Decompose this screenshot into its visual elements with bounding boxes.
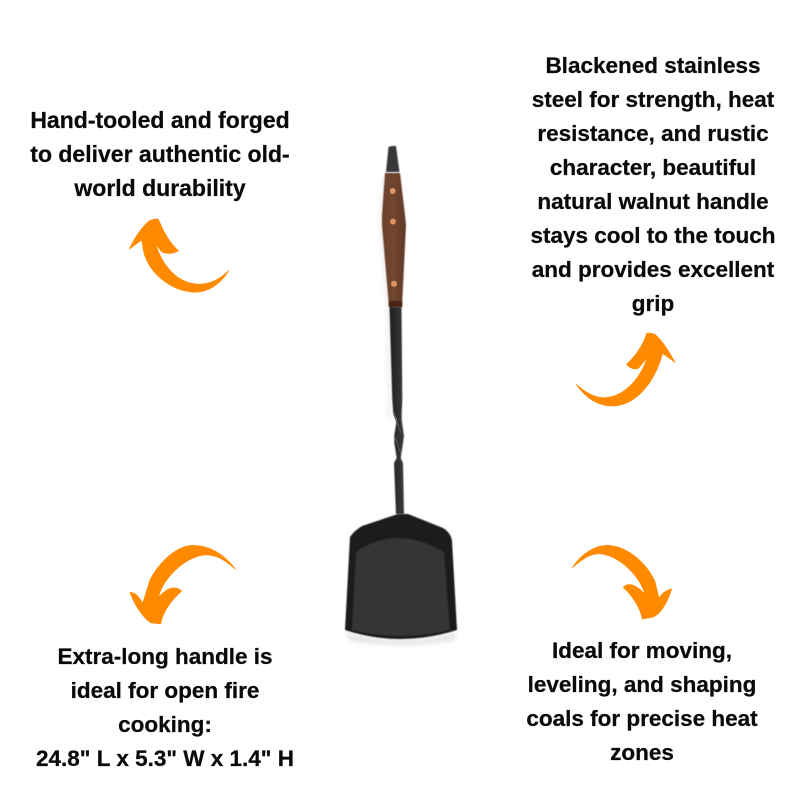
text: hand-tooled: world durability (74, 175, 246, 201)
steel shaft with twist (390, 307, 404, 514)
text: blackened stainless steel (530, 53, 776, 316)
text: ideal for moving: zones (610, 740, 674, 765)
walnut handle (382, 173, 406, 307)
text: blackened stainless steel: and provides excellent (532, 257, 774, 282)
text: extra-long handle: ideal for open fire (71, 678, 259, 703)
text: extra-long handle: 24.8" L x 5.3" W x 1.4" H (36, 746, 294, 771)
text: hand-tooled: to deliver authentic old- (30, 141, 290, 167)
text: ideal for moving: coals for precise heat (526, 706, 758, 731)
text: extra-long handle (36, 644, 294, 771)
shovel shadow (346, 632, 456, 645)
text: ideal for moving: leveling, and shaping (528, 672, 756, 697)
text: blackened stainless steel: steel for strength, heat (532, 87, 774, 112)
handle tang tip (386, 146, 400, 172)
arrow: bottom right (572, 545, 672, 619)
text: blackened stainless steel: grip (632, 291, 674, 316)
text: blackened stainless steel: stays cool to the touch (530, 223, 776, 248)
handle soft shadow (380, 175, 392, 420)
text: extra-long handle: cooking: (118, 712, 212, 737)
text: blackened stainless steel: natural walnut handle (537, 189, 769, 214)
shovel illustration (345, 146, 457, 645)
text: hand-tooled: Hand-tooled and forged (30, 107, 290, 133)
text: ideal for moving: Ideal for moving, (552, 638, 732, 663)
text: blackened stainless steel: resistance, and rustic (537, 121, 769, 146)
arrow: bottom left (130, 545, 236, 624)
copper rivets (390, 188, 397, 287)
text: blackened stainless steel: Blackened stainless (545, 53, 761, 78)
handle collar (389, 301, 402, 307)
shovel blade rim (345, 514, 457, 639)
text: blackened stainless steel: character, beautiful (550, 155, 756, 180)
text: extra-long handle: Extra-long handle is (57, 644, 273, 669)
shovel blade interior (352, 538, 450, 636)
text: ideal for moving (526, 638, 758, 765)
arrow: top left (129, 219, 229, 292)
twist highlights (394, 414, 401, 454)
text: hand-tooled (30, 107, 290, 202)
arrow: right middle (576, 333, 675, 406)
